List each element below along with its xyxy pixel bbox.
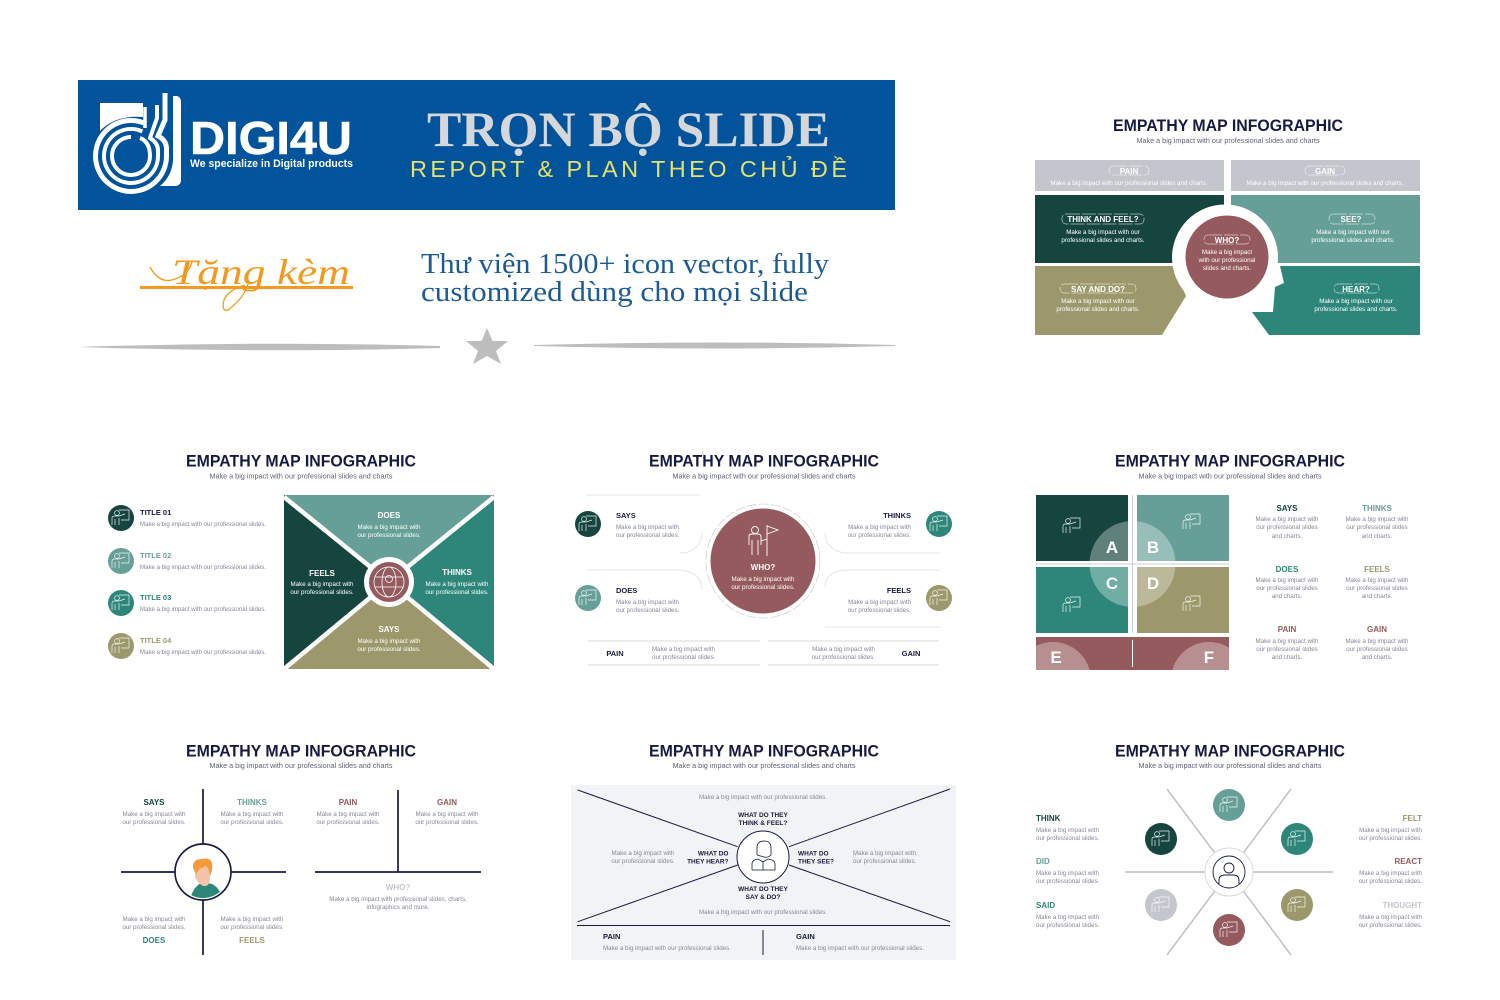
x-shaped quadrant chart: DOES bbox=[378, 511, 401, 520]
tile grid a-f: A bbox=[1106, 538, 1118, 557]
panel: hear: Make a big impact with our bbox=[1319, 298, 1393, 305]
text: said: our professional slides. bbox=[1036, 922, 1100, 929]
center circle: who: WHO? bbox=[1215, 236, 1239, 245]
icon node: upper right bbox=[1281, 823, 1313, 855]
x-shaped quadrant chart: our professional slides. bbox=[290, 589, 354, 596]
text: gain: Make a big impact with our professional slides. bbox=[796, 945, 924, 952]
banner subtitle: REPORT & PLAN THEO CHỦ ĐỀ bbox=[410, 154, 847, 182]
bar: pain: Make a big impact with bbox=[652, 646, 715, 653]
text: said bbox=[1036, 901, 1100, 929]
text: did: DID bbox=[1036, 857, 1050, 866]
logo mark bbox=[95, 93, 181, 191]
list item 01: TITLE 01 bbox=[140, 508, 171, 517]
icon node: upper left bbox=[1145, 823, 1177, 855]
subtitle: Make a big impact with our professional slides and charts bbox=[210, 472, 393, 480]
text: hear: our professional slides. bbox=[611, 858, 675, 865]
panel: gain: Make a big impact with our professional slides and charts. bbox=[1246, 180, 1404, 187]
panel: see bbox=[1231, 195, 1420, 263]
text: pain: and charts. bbox=[1272, 654, 1303, 661]
cross lines left bbox=[121, 789, 286, 955]
list item 04: Make a big impact with our professional slides. bbox=[140, 649, 266, 656]
bonus script label bbox=[140, 252, 353, 310]
center circle: who bbox=[706, 504, 820, 618]
text: react: REACT bbox=[1394, 857, 1422, 866]
text: thought bbox=[1359, 901, 1423, 929]
text: pain: PAIN bbox=[1278, 625, 1296, 634]
text: think bbox=[1036, 814, 1100, 842]
item: says: SAYS bbox=[616, 511, 636, 520]
text: feels: FEELS bbox=[239, 936, 266, 945]
text: hear: WHAT DO bbox=[698, 850, 728, 858]
text: gain: Make a big impact with bbox=[1346, 638, 1409, 645]
x-shaped quadrant chart: Make a big impact with bbox=[358, 638, 421, 645]
bar: gain: GAIN bbox=[902, 649, 920, 658]
text: pain: Make a big impact with bbox=[1256, 638, 1319, 645]
center circle: who: slides and charts. bbox=[1203, 265, 1251, 272]
text: thinks: Make a big impact with bbox=[221, 811, 284, 818]
text: pain: our professional slides. bbox=[316, 819, 380, 826]
item: says: Make a big impact with bbox=[616, 524, 679, 531]
text: pain: our professional slides bbox=[1256, 646, 1318, 653]
x-shaped quadrant chart: Make a big impact with bbox=[358, 524, 421, 531]
text: said: SAID bbox=[1036, 901, 1055, 910]
text: gain bbox=[796, 932, 924, 952]
text: says: our professional slides bbox=[1256, 524, 1318, 531]
panel: say and do bbox=[1035, 266, 1186, 335]
text: said: Make a big impact with bbox=[1036, 914, 1099, 921]
item: does bbox=[575, 585, 680, 614]
item: says: our professional slides. bbox=[616, 532, 680, 539]
text: gain: our professional slides. bbox=[415, 819, 479, 826]
panel: say and do: professional slides and charts. bbox=[1056, 306, 1140, 313]
text: see: Make a big impact with bbox=[853, 850, 916, 857]
x-shaped quadrant chart: THINKS bbox=[442, 568, 473, 577]
logo tagline: We specialize in Digital products bbox=[190, 158, 353, 170]
icon node: top bbox=[1213, 789, 1245, 821]
text: feels: and charts. bbox=[1362, 593, 1393, 600]
text: felt: our professional slides. bbox=[1359, 835, 1422, 842]
x-shaped quadrant chart: SAYS bbox=[378, 625, 400, 634]
slide 6: grey panel with x lines bbox=[571, 742, 956, 960]
icon node: bottom bbox=[1213, 914, 1245, 946]
logo wordmark: DIGI4U bbox=[190, 112, 352, 164]
text: does bbox=[1256, 565, 1319, 600]
panel: hear: professional slides and charts. bbox=[1314, 306, 1398, 313]
text: think and feel: WHAT DO THEY bbox=[738, 812, 789, 819]
x-shaped quadrant chart: Make a big impact with bbox=[291, 581, 354, 588]
icon node: lower right bbox=[1281, 889, 1313, 921]
text: feels: our professional slides bbox=[1346, 585, 1408, 592]
panel: gain bbox=[1231, 160, 1420, 191]
text: feels: Make a big impact with bbox=[1346, 577, 1409, 584]
text: felt: FELT bbox=[1403, 814, 1422, 823]
text: did: our professional slides. bbox=[1036, 878, 1100, 885]
subtitle: Make a big impact with our professional slides and charts bbox=[1136, 136, 1320, 145]
text: says bbox=[122, 798, 186, 826]
text: say and do: Make a big impact with our professional slides. bbox=[699, 909, 827, 916]
panel: see: Make a big impact with our bbox=[1316, 229, 1390, 236]
title: EMPATHY MAP INFOGRAPHIC bbox=[1113, 116, 1343, 135]
x lines bbox=[577, 789, 950, 955]
text: think: Make a big impact with bbox=[1036, 827, 1099, 834]
text: pain bbox=[1256, 625, 1319, 661]
item: feels: our professional slides. bbox=[848, 607, 911, 614]
text: who: Make a big impact with professional slides, charts, bbox=[329, 896, 467, 903]
list item 02: TITLE 02 bbox=[140, 551, 171, 560]
text: think and feel: THINK & FEEL? bbox=[739, 820, 787, 827]
text: thinks: THINKS bbox=[1362, 504, 1393, 513]
text: does: DOES bbox=[143, 936, 166, 945]
item: says bbox=[575, 511, 680, 539]
text: pain bbox=[316, 798, 380, 826]
text: says: our professional slides. bbox=[122, 819, 186, 826]
panel: think and feel: Make a big impact with our bbox=[1066, 229, 1140, 236]
text: thought: our professional slides. bbox=[1359, 922, 1422, 929]
text: hear: THEY HEAR? bbox=[687, 858, 729, 866]
tile grid a-f bbox=[1036, 495, 1229, 670]
text: feels bbox=[1346, 565, 1409, 600]
title: EMPATHY MAP INFOGRAPHIC bbox=[649, 452, 879, 470]
item: feels bbox=[848, 585, 952, 614]
bar: gain: our professional slides. bbox=[812, 654, 875, 661]
item: does: our professional slides. bbox=[616, 607, 680, 614]
text: who bbox=[329, 883, 467, 911]
text: did: Make a big impact with bbox=[1036, 870, 1099, 877]
text: react bbox=[1359, 857, 1423, 885]
text: does: and charts. bbox=[1272, 593, 1303, 600]
bar: gain bbox=[768, 641, 939, 665]
center circle: who: with our professional bbox=[1198, 257, 1255, 264]
text: thought: THOUGHT bbox=[1382, 901, 1422, 910]
text: think and feel: Make a big impact with our professional slides. bbox=[699, 794, 827, 801]
title: EMPATHY MAP INFOGRAPHIC bbox=[186, 742, 416, 760]
panel: think and feel: THINK AND FEEL? bbox=[1067, 215, 1139, 224]
list item 04 bbox=[108, 633, 266, 659]
text: pain bbox=[603, 932, 731, 952]
text: see: THEY SEE? bbox=[798, 858, 834, 866]
x-shaped quadrant chart: our professional slides. bbox=[357, 646, 421, 653]
text: feels: FEELS bbox=[1364, 565, 1391, 574]
tile grid a-f: F bbox=[1204, 648, 1214, 667]
center circle: who: WHO? bbox=[751, 563, 775, 572]
text: hear: Make a big impact with bbox=[612, 850, 675, 857]
text: gain bbox=[1346, 625, 1409, 661]
text: did bbox=[1036, 857, 1100, 885]
slide 1: head empathy map bbox=[1035, 116, 1420, 335]
text: says: SAYS bbox=[1276, 504, 1298, 513]
text: felt: Make a big impact with bbox=[1359, 827, 1423, 834]
subtitle: Make a big impact with our professional slides and charts bbox=[210, 761, 393, 770]
text: gain: GAIN bbox=[796, 932, 815, 941]
item: does: DOES bbox=[616, 586, 637, 595]
text: does: Make a big impact with bbox=[1256, 577, 1319, 584]
subtitle: Make a big impact with our professional slides and charts bbox=[1138, 472, 1322, 480]
panel: see: professional slides and charts. bbox=[1311, 237, 1395, 244]
panel: pain: Make a big impact with our professional slides and charts. bbox=[1050, 180, 1208, 187]
list item 03 bbox=[108, 590, 266, 616]
text: feels: our professional slides. bbox=[220, 924, 284, 931]
center circle: who: Make a big impact bbox=[1202, 249, 1252, 256]
text: thinks: Make a big impact with bbox=[1346, 516, 1409, 523]
bar: pain: our professional slides. bbox=[652, 654, 716, 661]
text: thinks: THINKS bbox=[237, 798, 268, 807]
subtitle: Make a big impact with our professional slides and charts bbox=[672, 472, 856, 480]
text: think: THINK bbox=[1036, 814, 1061, 823]
text: gain: GAIN bbox=[437, 798, 457, 807]
panel: think and feel bbox=[1035, 195, 1224, 263]
bar: pain bbox=[588, 641, 760, 665]
list item 01: Make a big impact with our professional slides. bbox=[140, 521, 266, 528]
bar: pain: PAIN bbox=[606, 649, 624, 658]
text: who: infographics and more. bbox=[367, 904, 430, 911]
list item 04: TITLE 04 bbox=[140, 636, 172, 645]
center user icon bbox=[1205, 848, 1253, 896]
text: feels bbox=[220, 916, 284, 945]
text: see bbox=[798, 850, 917, 866]
list item 02 bbox=[108, 548, 266, 574]
panel background bbox=[571, 785, 956, 960]
t-shaped lines right bbox=[315, 790, 481, 872]
subtitle: Make a big impact with our professional slides and charts bbox=[1138, 761, 1322, 770]
text: react: our professional slides. bbox=[1359, 878, 1422, 885]
text: does: DOES bbox=[1276, 565, 1299, 574]
text: see: WHAT DO bbox=[798, 850, 829, 858]
text: does: our professional slides bbox=[1256, 585, 1318, 592]
subtitle: Make a big impact with our professional slides and charts bbox=[672, 761, 856, 770]
list item 01 bbox=[108, 505, 266, 531]
text: says: Make a big impact with bbox=[123, 811, 186, 818]
text: gain: and charts. bbox=[1362, 654, 1393, 661]
slide 4: lettered tiles bbox=[1036, 455, 1408, 670]
panel: think and feel: professional slides and charts. bbox=[1061, 237, 1145, 244]
bonus description: customized dùng cho mọi slide bbox=[421, 276, 808, 308]
panel: pain: PAIN bbox=[1120, 167, 1138, 176]
item: thinks: Make a big impact with bbox=[848, 524, 912, 531]
text: says bbox=[1256, 504, 1319, 540]
x-shaped quadrant chart: Make a big impact with bbox=[426, 581, 489, 588]
text: thinks: our professional slides. bbox=[220, 819, 284, 826]
text: react: Make a big impact with bbox=[1359, 870, 1423, 877]
list item 03: Make a big impact with our professional slides. bbox=[140, 606, 266, 613]
center circle: who: our professional slides. bbox=[731, 584, 795, 591]
bar: gain: Make a big impact with bbox=[812, 646, 876, 653]
x-shaped quadrant chart: our professional slides. bbox=[425, 589, 489, 596]
panel: gain: GAIN bbox=[1315, 167, 1335, 176]
text: who: WHO? bbox=[386, 883, 410, 892]
item: feels: Make a big impact with bbox=[848, 599, 912, 606]
banner bbox=[78, 80, 895, 210]
list item 02: Make a big impact with our professional slides. bbox=[140, 564, 266, 571]
title: EMPATHY MAP INFOGRAPHIC bbox=[1115, 452, 1345, 470]
text: pain: Make a big impact with our professional slides. bbox=[603, 945, 731, 952]
text: say and do: SAY & DO? bbox=[746, 894, 780, 901]
icon: globe person bbox=[374, 567, 404, 597]
center circle: who bbox=[1186, 216, 1268, 298]
title: EMPATHY MAP INFOGRAPHIC bbox=[649, 742, 879, 760]
text: gain: Make a big impact with bbox=[416, 811, 479, 818]
divider with star bbox=[78, 328, 895, 364]
text: pain: Make a big impact with bbox=[317, 811, 380, 818]
panel: see: SEE? bbox=[1341, 215, 1362, 224]
list item 03: TITLE 03 bbox=[140, 593, 171, 602]
text: hear bbox=[611, 850, 729, 866]
icon: person with flag bbox=[749, 525, 778, 556]
icon node: lower left bbox=[1145, 889, 1177, 921]
panel: pain bbox=[1035, 160, 1224, 191]
tile grid a-f: B bbox=[1147, 538, 1159, 557]
text: gain: GAIN bbox=[1367, 625, 1387, 634]
text: pain: PAIN bbox=[339, 798, 357, 807]
center circle: who: Make a big impact with bbox=[732, 576, 795, 583]
text: says: and charts. bbox=[1272, 533, 1303, 540]
text: think: our professional slides. bbox=[1036, 835, 1100, 842]
text: gain bbox=[415, 798, 479, 826]
slide 7: radial spokes bbox=[1036, 742, 1423, 955]
item: thinks: THINKS bbox=[883, 511, 911, 520]
head silhouette bbox=[1172, 204, 1278, 310]
text: thinks: and charts. bbox=[1362, 533, 1393, 540]
item: feels: FEELS bbox=[887, 586, 911, 595]
text: says: Make a big impact with bbox=[1256, 516, 1319, 523]
item: thinks: our professional slides. bbox=[848, 532, 911, 539]
panel: say and do: SAY AND DO? bbox=[1071, 285, 1125, 294]
panel: hear bbox=[1252, 266, 1420, 335]
banner title: TRỌN BỘ SLIDE bbox=[427, 101, 830, 157]
bonus description bbox=[421, 248, 830, 308]
text: gain: our professional slides bbox=[1346, 646, 1408, 653]
text: thinks bbox=[220, 798, 284, 826]
panel: say and do: Make a big impact with our bbox=[1061, 298, 1135, 305]
x-shaped quadrant chart: our professional slides. bbox=[357, 532, 421, 539]
title: EMPATHY MAP INFOGRAPHIC bbox=[1115, 742, 1345, 760]
text: say and do bbox=[699, 886, 827, 916]
spokes bbox=[1125, 789, 1333, 955]
text: say and do: WHAT DO THEY bbox=[738, 886, 789, 893]
text: does bbox=[122, 916, 186, 945]
text: pain: PAIN bbox=[603, 932, 620, 941]
text: does: our professional slides. bbox=[122, 924, 186, 931]
panel: hear: HEAR? bbox=[1342, 285, 1370, 294]
text: says: SAYS bbox=[143, 798, 165, 807]
slide 2: four-triangle map bbox=[108, 452, 494, 669]
text: thought: Make a big impact with bbox=[1359, 914, 1423, 921]
tile grid a-f: E bbox=[1050, 648, 1062, 667]
item: does: Make a big impact with bbox=[616, 599, 679, 606]
text: thinks bbox=[1346, 504, 1409, 540]
text: thinks: our professional slides bbox=[1346, 524, 1408, 531]
title: EMPATHY MAP INFOGRAPHIC bbox=[186, 452, 416, 470]
bonus script label: Tặng kèm bbox=[172, 252, 350, 292]
bonus description: Thư viện 1500+ icon vector, fully bbox=[421, 248, 830, 280]
text: see: our professional slides. bbox=[853, 858, 917, 865]
slide 3: central who circle bbox=[575, 452, 952, 665]
tile grid a-f: D bbox=[1147, 574, 1159, 593]
x-shaped quadrant chart: FEELS bbox=[309, 569, 336, 578]
center person circle bbox=[737, 831, 789, 883]
item: thinks bbox=[848, 511, 952, 539]
text: felt bbox=[1359, 814, 1423, 842]
x-shaped quadrant chart bbox=[284, 495, 494, 669]
avatar bbox=[175, 844, 231, 901]
text: feels: Make a big impact with bbox=[221, 916, 284, 923]
text: does: Make a big impact with bbox=[123, 916, 186, 923]
text: think and feel bbox=[699, 794, 827, 827]
slide 5: cross with avatar bbox=[121, 742, 481, 955]
tile grid a-f: C bbox=[1106, 574, 1118, 593]
